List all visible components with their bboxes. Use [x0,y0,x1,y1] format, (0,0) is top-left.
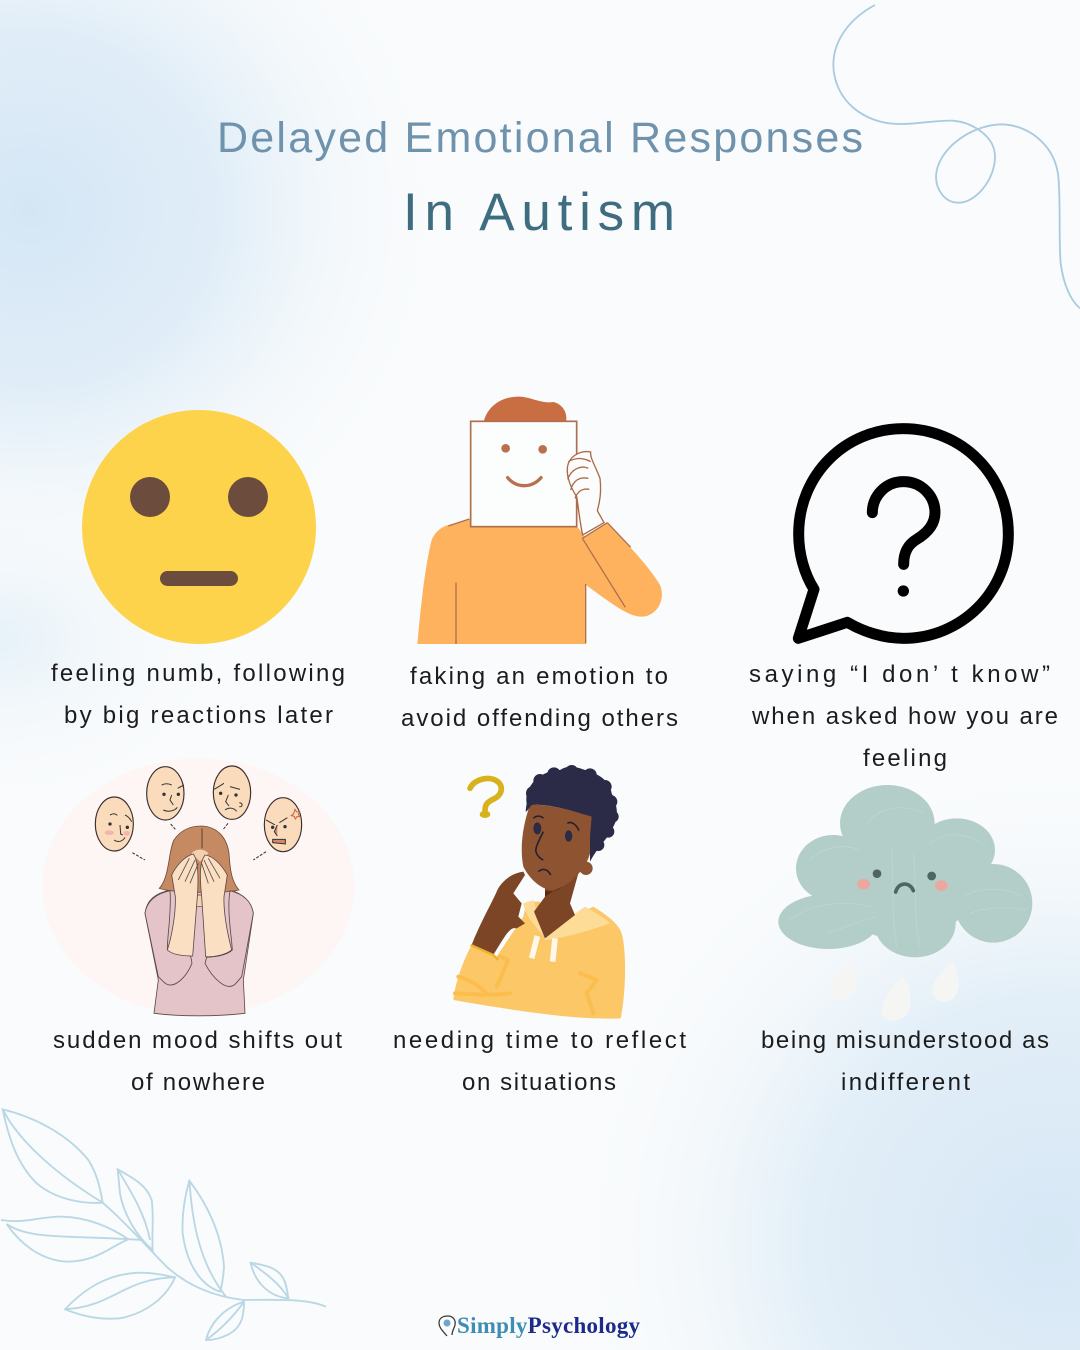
caption: sudden mood shifts out [53,1027,342,1054]
caption [401,663,678,732]
wordmark: SimplyPsychology [457,1313,640,1338]
icon: person holding smiley card [417,397,662,644]
title line 1: Delayed Emotional Responses [217,114,863,162]
icon: sad rain cloud [778,785,1032,1021]
caption [53,1027,342,1096]
icon: thinking man with question mark [453,765,625,1019]
item: faking an emotion [401,397,678,732]
icon: woman covering face with four masks [42,758,354,1016]
caption: saying “I don’ t know” [749,661,1050,688]
icon: speech bubble with question mark [798,429,1008,638]
caption: on situations [462,1069,616,1096]
icon: neutral emoji [82,410,316,644]
caption: of nowhere [131,1069,265,1096]
item: saying I don't know [749,429,1058,772]
caption: feeling [863,745,947,772]
caption: when asked how you are [751,703,1058,730]
title line 2: In Autism [403,183,675,242]
decorative curly line [833,5,1080,308]
caption [761,1027,1049,1096]
decorative leaf branch [1,1109,326,1340]
caption: indifferent [841,1069,970,1096]
caption [749,661,1058,772]
caption: faking an emotion to [410,663,668,690]
caption: being misunderstood as [761,1027,1049,1054]
logo: Simply Psychology [439,1313,640,1338]
caption [51,660,345,729]
item: sudden mood shifts [42,758,354,1096]
item: neutral face [51,410,345,729]
title [217,114,863,242]
caption: by big reactions later [64,702,333,729]
item: needing time to reflect [393,765,686,1096]
caption: avoid offending others [401,705,678,732]
icon: head with brain [439,1316,455,1336]
caption: feeling numb, following [51,660,345,687]
caption: needing time to reflect [393,1027,686,1054]
item: being misunderstood [761,785,1049,1096]
caption [393,1027,686,1096]
